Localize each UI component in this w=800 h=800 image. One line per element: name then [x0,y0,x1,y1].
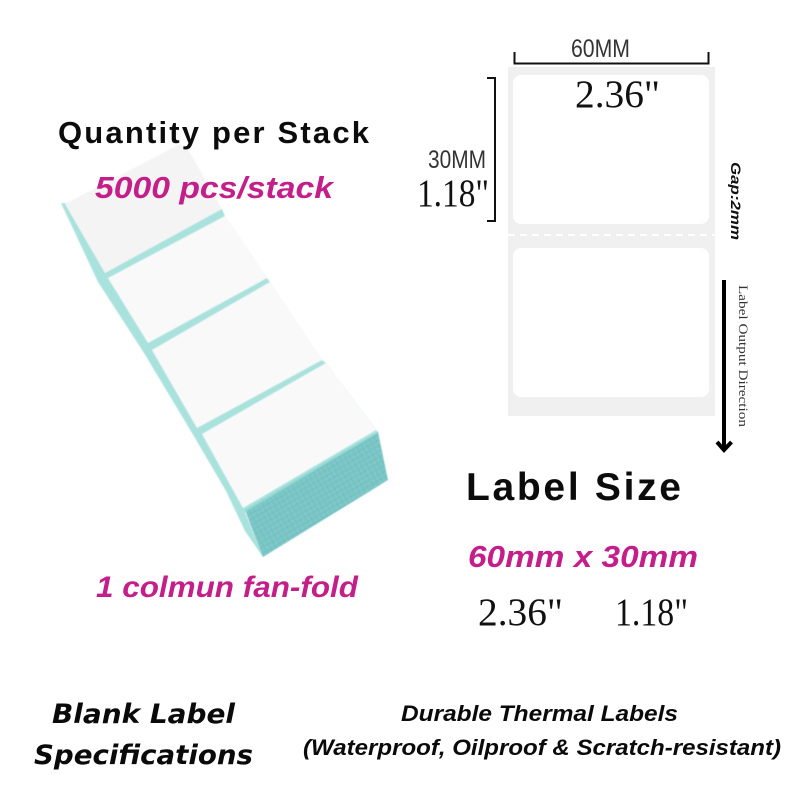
width bracket [514,52,708,64]
gap note: Gap:2mm [728,162,743,240]
footer title: line 1: Blank Label [52,699,236,730]
perforation line [508,234,715,236]
size in inches: width: 2.36" [478,591,563,634]
value: 60mm x 30mm: 60mm x 30mm [468,539,698,574]
width label: 60MM: 60MM [571,35,630,63]
value: 5000 pcs/stack: 5000 pcs/stack [95,170,335,205]
panel: fan-fold label stack [61,144,388,557]
stack side and gaps [61,203,377,557]
size in inches: height: 1.18" [615,591,688,634]
label 3 [152,282,322,428]
label 2 [108,216,267,343]
lower label [513,248,709,397]
label backing strip [508,67,715,416]
caption: 1 colmun fan-fold: 1 colmun fan-fold [96,571,359,604]
label 4 [202,363,376,508]
panel: label size diagram [508,67,715,416]
block top edge [245,432,378,511]
output direction note: Label Output Direction [736,285,751,428]
stack edge block [245,432,388,557]
height in inches: 1.18" [417,172,489,215]
upper label [513,75,709,224]
label 1 [65,144,222,273]
footer title: line 2: Specifications [34,740,253,771]
heading: label size: Label Size [466,466,681,509]
height bracket [487,78,495,221]
footer note: line 1: Durable Thermal Labels [401,701,678,726]
width in inches: 2.36" [575,73,660,116]
arrow: output direction [717,280,732,450]
height label: 30MM: 30MM [428,146,486,174]
footer note: line 2: (Waterproof, Oilproof & Scratch-resistant) [303,735,781,760]
heading: quantity per stack: Quantity per Stack [58,115,370,150]
